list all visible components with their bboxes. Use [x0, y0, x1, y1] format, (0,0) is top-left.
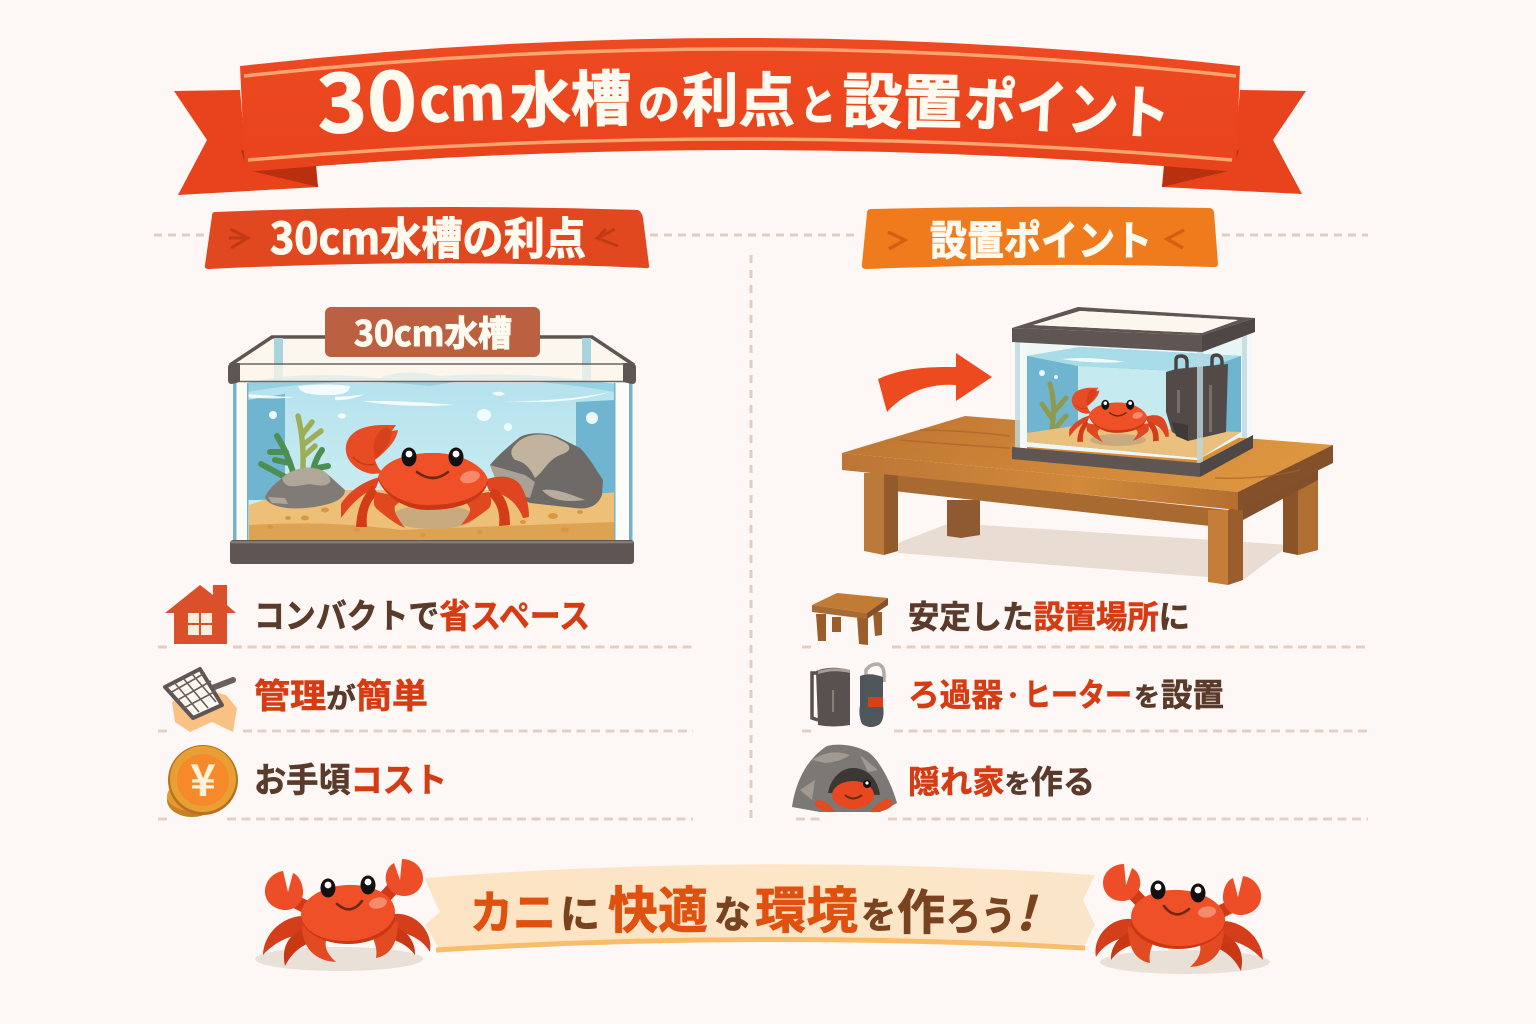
plants	[261, 416, 328, 478]
ribbon right tail	[1162, 90, 1306, 194]
banner text: !	[1016, 878, 1038, 944]
glass pillars	[1015, 332, 1252, 465]
title text: 設置	[842, 53, 963, 142]
floor shadow	[898, 523, 1290, 580]
tank interior	[1027, 342, 1197, 460]
item: filter and heater: ろ過器	[908, 670, 1003, 716]
icon: net and hand	[165, 669, 237, 732]
title text: ポイント	[963, 57, 1172, 152]
plant	[1042, 384, 1066, 428]
crab mascot right	[1096, 864, 1270, 974]
back legs	[947, 500, 980, 538]
banner background	[425, 864, 1095, 950]
tank back rim	[230, 337, 634, 365]
banner underline	[436, 939, 1085, 950]
bubbles	[269, 411, 277, 419]
banner text: 快適	[608, 871, 708, 943]
banner text: を	[861, 887, 896, 939]
item: filter and heater: 設置	[1161, 670, 1224, 716]
dashed connector lines	[154, 234, 1368, 236]
item: filter and heater: を	[1134, 677, 1160, 714]
small crab	[1069, 388, 1169, 442]
tank label: 30cm水槽	[354, 306, 512, 357]
crab	[341, 425, 529, 528]
banner text: 環境	[755, 871, 858, 943]
left rock	[265, 468, 345, 508]
icon: small table	[812, 593, 888, 645]
sand	[1027, 425, 1241, 458]
water	[247, 383, 615, 540]
title text: 水槽	[509, 51, 632, 140]
centre divider	[750, 255, 752, 825]
icon: cave with crab	[792, 745, 897, 812]
front rim	[231, 365, 634, 381]
water highlights	[247, 384, 610, 406]
crab shadow	[391, 505, 475, 529]
icon: yen coin: ¥	[190, 745, 216, 809]
closing banner	[425, 864, 1095, 950]
title text: と	[800, 72, 836, 133]
front left leg	[864, 473, 884, 555]
small crab shadow	[1090, 434, 1146, 446]
table apron	[884, 473, 1228, 528]
illustration: tank on wooden table	[842, 307, 1333, 585]
sand	[249, 490, 615, 540]
row dividers left	[158, 647, 693, 819]
banner text: な	[714, 884, 751, 939]
banner text	[470, 871, 1038, 944]
banner text: カニ	[470, 877, 556, 943]
title text: 利点	[682, 54, 795, 138]
right rock	[490, 433, 603, 508]
item: low cost: お手頃コスト	[254, 753, 447, 802]
title ribbon	[174, 38, 1306, 195]
icon: yen coin	[167, 745, 238, 817]
title text: の	[638, 71, 680, 132]
item: compact: コンバクトで省スペース	[254, 589, 590, 638]
arrow: place on table	[878, 353, 992, 412]
glass walls	[233, 383, 632, 540]
filter	[1166, 355, 1228, 441]
crab mascot left	[255, 859, 430, 971]
item: filter and heater	[908, 670, 1224, 716]
top rim	[1012, 307, 1255, 335]
bottom rim	[1012, 447, 1200, 477]
banner text: 作	[897, 873, 945, 943]
item: stable location: 安定した設置場所に	[908, 592, 1190, 638]
front right leg	[1208, 510, 1228, 585]
ribbon main band	[240, 38, 1240, 172]
icon: house	[165, 585, 236, 644]
title text: cm	[417, 47, 507, 140]
small tank	[1012, 307, 1255, 477]
tank base	[230, 540, 634, 564]
panel heading: setup points: 設置ポイント	[930, 207, 1152, 267]
item: filter and heater: ヒーター	[1024, 670, 1132, 716]
illustration: 30cm tank with crab	[228, 306, 636, 564]
item: easy management: 管理が簡単	[254, 669, 428, 718]
ribbon fold shadows	[241, 150, 1239, 187]
ribbon left tail	[174, 90, 318, 195]
item: hideout: 隠れ家を作る	[908, 757, 1095, 803]
ribbon stripes	[244, 49, 1236, 160]
panel heading: benefits: 30cm水槽の利点	[270, 203, 586, 267]
table top	[842, 416, 1333, 492]
banner text: に	[560, 882, 600, 940]
panel heading: setup points	[862, 207, 1218, 269]
banner text: ろう	[946, 884, 1016, 942]
row dividers right	[796, 647, 1368, 819]
title text	[315, 38, 1172, 157]
icon: filter and heater	[812, 664, 884, 727]
title text: 30	[315, 38, 419, 157]
